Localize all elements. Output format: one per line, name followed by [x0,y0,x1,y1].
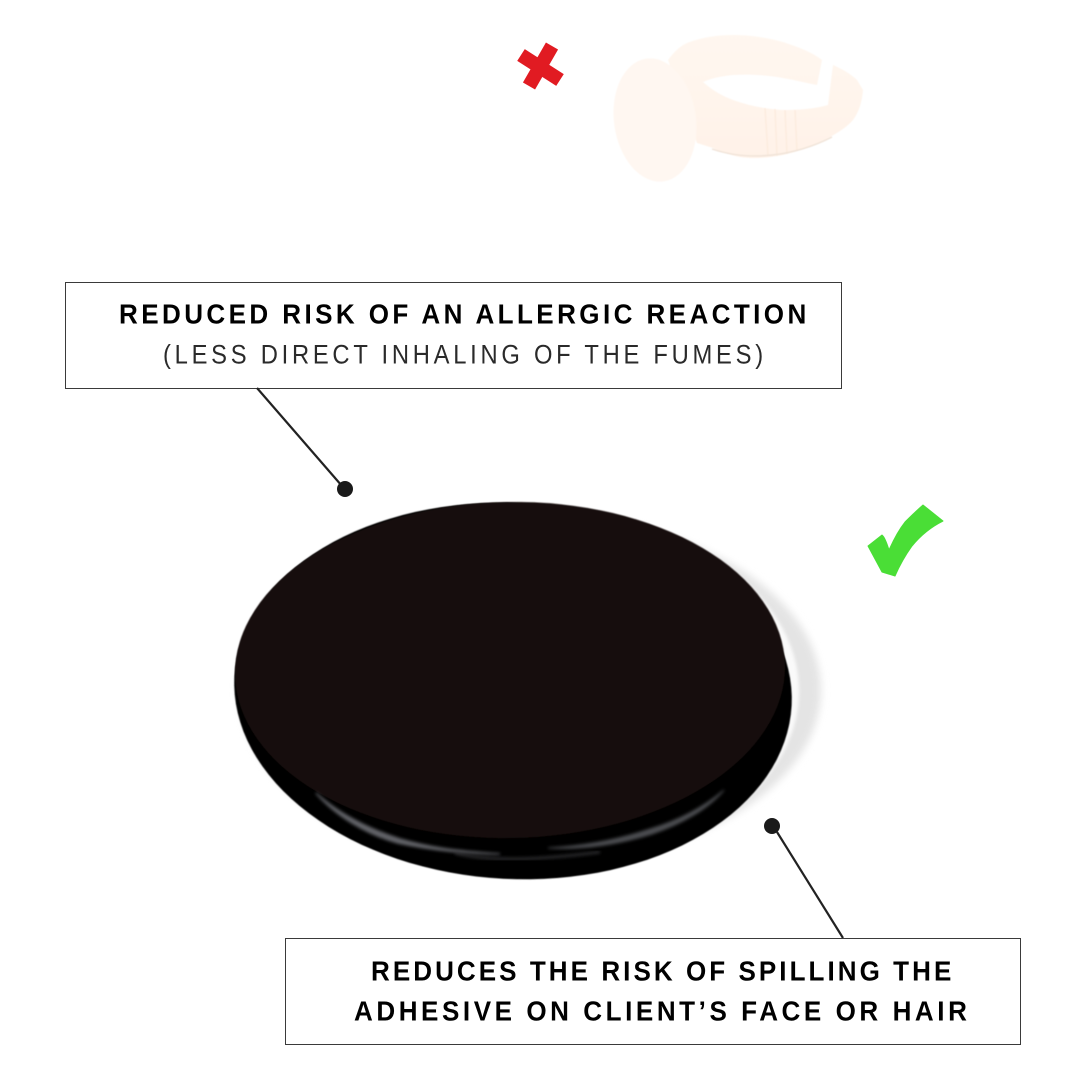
disc glue holder [225,489,821,893]
leader stroke [257,388,342,486]
rib two [775,109,777,156]
cross stroke two [529,46,552,86]
icon: white ring glue holder [606,35,863,187]
ring flat plate [606,53,704,187]
rib one [765,108,768,155]
callout text line 1: REDUCES THE RISK OF SPILLING THE [371,956,951,987]
leader stroke [777,832,843,938]
leader line: allergic callout to disc [257,388,353,497]
disc top surface [232,497,788,843]
callout box [66,282,842,388]
callout subtext: (LESS DIRECT INHALING OF THE FUMES) [163,340,763,370]
disc cast shadow [239,515,821,865]
icon: green check mark [868,505,943,576]
callout: spill risk [286,938,1020,1044]
ring ribs [765,108,797,156]
leader line: spill callout to disc [764,818,843,938]
ring band [668,35,863,158]
cross stroke one [521,55,560,80]
callout heading: REDUCED RISK OF AN ALLERGIC REACTION [119,299,806,330]
rib four [795,110,797,151]
leader dot [337,481,353,497]
callout: reduced allergic reaction [66,282,842,388]
icon: red cross [521,46,560,86]
ring shadow edge [712,137,832,156]
leader dot [764,818,780,834]
disc outer rim [225,489,801,893]
rib three [785,110,787,154]
disc highlight lower right [548,790,724,848]
disc highlight lower left [316,793,500,854]
callout text line 2: ADHESIVE ON CLIENT’S FACE OR HAIR [354,996,967,1027]
disc bottom sheen [455,852,600,859]
disc white halo [237,505,799,877]
callout box [286,938,1020,1044]
